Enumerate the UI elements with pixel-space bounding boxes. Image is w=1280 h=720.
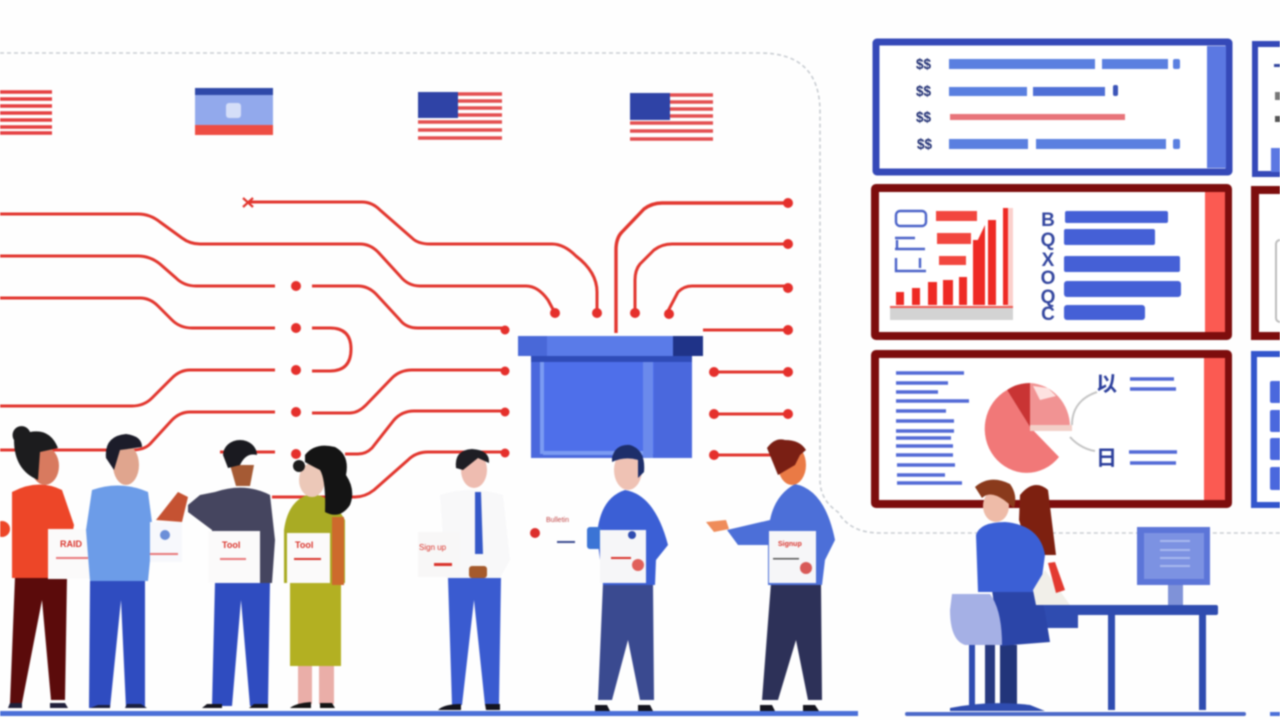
paper: Tool xyxy=(222,540,240,550)
pie legend lines xyxy=(1129,379,1177,463)
monitor xyxy=(1137,527,1210,605)
floor lines xyxy=(0,711,1280,716)
paper xyxy=(769,531,816,583)
pie labels: 日 xyxy=(1096,447,1117,470)
paper xyxy=(48,529,100,579)
person 4: olive dress xyxy=(284,446,352,708)
head xyxy=(983,490,1009,522)
cropped panel column at right edge xyxy=(1254,44,1280,505)
ponytail xyxy=(1019,485,1056,555)
person 3: dark sweater xyxy=(188,440,275,708)
legend bars xyxy=(936,211,977,265)
bar chart xyxy=(890,208,1013,320)
row labels: $$ xyxy=(916,83,932,100)
paper: RAID xyxy=(60,539,82,549)
hand and paper xyxy=(150,492,188,562)
horizontal bars xyxy=(1064,211,1181,320)
chair legs and base xyxy=(950,645,1045,711)
dashboard panel: text and pie chart xyxy=(875,354,1228,504)
rotated list labels: X xyxy=(1042,250,1055,271)
red tag xyxy=(1048,562,1065,593)
desk xyxy=(1040,605,1218,710)
chair back xyxy=(950,594,1002,645)
legend outlines xyxy=(895,211,926,271)
right paper xyxy=(530,517,575,543)
seated analyst at desk xyxy=(950,480,1218,711)
connector end dots xyxy=(243,198,793,460)
rotated list labels: B xyxy=(1041,210,1055,231)
rotated list labels: C xyxy=(1041,304,1055,325)
pie labels: 以 xyxy=(1096,373,1117,396)
pie labels xyxy=(1096,373,1117,470)
row bars xyxy=(949,59,1180,149)
left paper: Sign up xyxy=(419,543,447,552)
document xyxy=(1033,570,1070,605)
person 2: light blue sweater xyxy=(86,434,188,708)
skirt xyxy=(992,590,1050,646)
left paper xyxy=(418,532,460,577)
paper: Tool xyxy=(295,540,313,550)
person 6: blue sweater, navy trousers xyxy=(587,445,668,711)
flag 4 xyxy=(630,93,713,141)
row labels: $$ xyxy=(917,136,933,153)
flag 1 xyxy=(0,90,52,134)
dashboard panel: bar chart and list xyxy=(875,188,1228,336)
row labels xyxy=(916,56,933,153)
flag 3 xyxy=(418,92,502,140)
rotated list labels: Q xyxy=(1041,287,1055,308)
person 7: blue sweater, dark trousers xyxy=(706,439,835,711)
person 1: red sweater xyxy=(0,426,100,708)
dashed container outline xyxy=(0,53,1280,533)
paper xyxy=(287,533,330,583)
paper xyxy=(208,531,260,583)
row labels: $$ xyxy=(916,109,932,126)
top xyxy=(976,522,1045,592)
flag 2 xyxy=(195,88,273,135)
person 5: white shirt with tie xyxy=(418,449,575,710)
dashboard panel: top bars xyxy=(876,42,1229,172)
right paper: Bulletin xyxy=(546,517,569,524)
pie connector lines xyxy=(1070,392,1097,451)
paper xyxy=(600,530,646,583)
rotated list labels: Q xyxy=(1041,230,1055,251)
paper: Signup xyxy=(778,541,802,548)
row labels: $$ xyxy=(916,56,932,73)
pie chart xyxy=(985,383,1072,473)
rotated list labels: O xyxy=(1041,268,1055,289)
central ballot box xyxy=(518,336,703,458)
rotated list labels xyxy=(1041,210,1055,325)
text lines xyxy=(896,373,969,483)
network of connector lines xyxy=(0,202,788,497)
flags row xyxy=(0,88,713,141)
